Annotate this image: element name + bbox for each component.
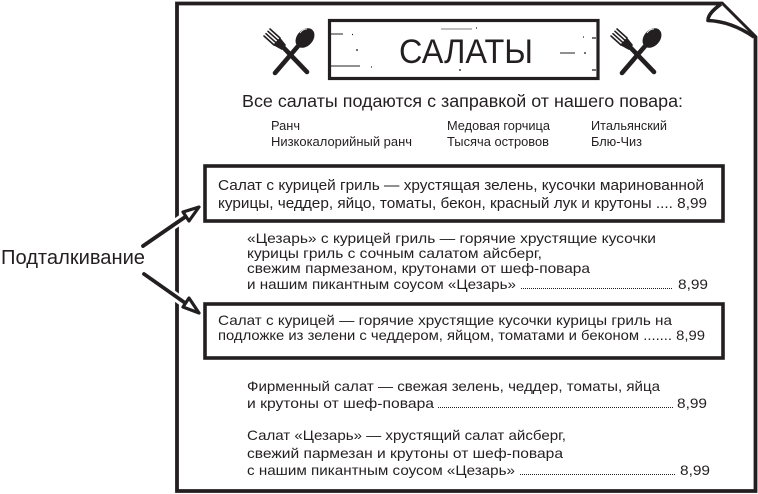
menu item: Caesar salad: с нашим пикантным соусом «Цезарь» <box>247 462 515 478</box>
panel: highlighted crispy chicken salad <box>205 304 723 358</box>
dressing list: Медовая горчица <box>447 119 550 133</box>
arrow: to first highlighted item <box>143 207 199 246</box>
subtitle: Все салаты подаются с заправкой от нашего повара: <box>242 91 683 111</box>
menu item: Caesar salad: Салат «Цезарь» — хрустящий салат айсберг, <box>247 427 566 443</box>
title: САЛАТЫ <box>399 33 533 71</box>
menu item: Caesar with grilled chicken <box>247 230 708 292</box>
menu item: signature salad: и крутоны от шеф-повара <box>247 395 434 411</box>
menu item: Caesar with grilled chicken: курицы гриль с сочным салатом айсберг, <box>247 245 542 261</box>
icon: right fork and spoon <box>611 24 665 73</box>
panel: highlighted crispy chicken salad: Салат с курицей — горячие хрустящие кусочки курицы гриль на <box>218 312 672 328</box>
dressing list: Итальянский <box>591 119 667 133</box>
page frame with folded corner <box>177 4 756 491</box>
menu item: signature salad: Фирменный салат — свежая зелень, чеддер, томаты, яйца <box>247 378 660 394</box>
menu item: Caesar with grilled chicken: «Цезарь» с курицей гриль — горячие хрустящие кусочки <box>247 230 656 246</box>
label: nudge: Подталкивание <box>1 247 145 269</box>
panel: highlighted crispy chicken salad: подложке из зелени с чеддером, яйцом, томатами и беконом ....... 8,99 <box>218 327 705 343</box>
menu item: Caesar salad <box>247 427 710 478</box>
title box <box>330 20 598 78</box>
arrow: to second highlighted item <box>143 274 199 313</box>
panel: highlighted grilled chicken salad <box>205 166 723 221</box>
dressing list: Ранч <box>271 119 300 133</box>
menu item: Caesar with grilled chicken: 8,99 <box>678 276 708 292</box>
menu item: Caesar salad: 8,99 <box>680 462 710 478</box>
icon: left fork and spoon <box>264 24 318 73</box>
dressing list <box>271 119 667 149</box>
menu item: signature salad <box>247 378 707 411</box>
dressing list: Низкокалорийный ранч <box>271 135 412 149</box>
menu item: Caesar salad: свежий пармезан и крутоны от шеф-повара <box>247 445 563 461</box>
folded corner <box>708 4 754 37</box>
dressing list: Тысяча островов <box>447 135 549 149</box>
menu item: Caesar with grilled chicken: и нашим пикантным соусом «Цезарь» <box>247 276 516 292</box>
panel: highlighted grilled chicken salad: Салат с курицей гриль — хрустящая зелень, кусочки маринованной <box>218 178 704 194</box>
menu item: Caesar with grilled chicken: свежим пармезаном, крутонами от шеф-повара <box>247 260 590 276</box>
panel: highlighted grilled chicken salad: курицы, чеддер, яйцо, томаты, бекон, красный лук и крутоны .... 8,99 <box>218 196 707 212</box>
dressing list: Блю-Чиз <box>591 135 642 149</box>
menu item: signature salad: 8,99 <box>677 395 707 411</box>
